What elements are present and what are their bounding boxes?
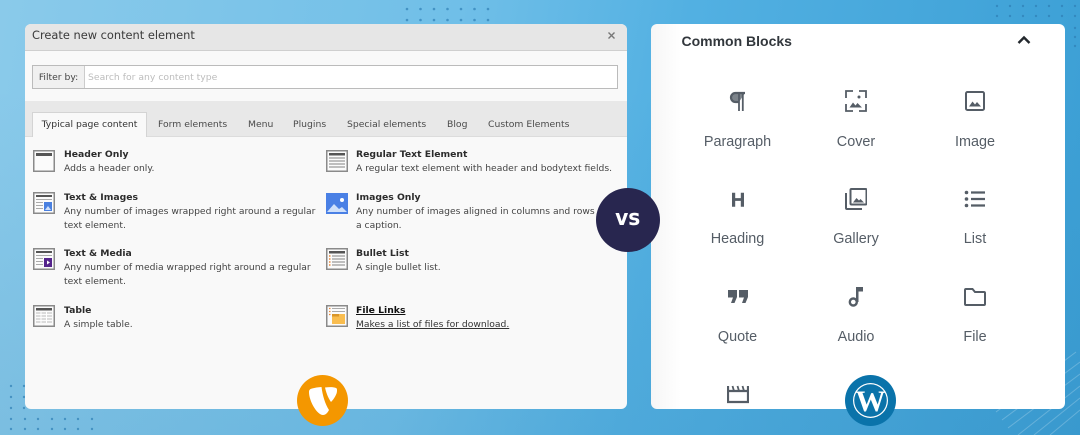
item: Images Only: Images Only	[356, 192, 421, 202]
WordPress logo	[845, 375, 896, 426]
tab: Special elements: Special elements	[347, 119, 426, 130]
heading: Common Blocks: Common Blocks	[682, 33, 792, 49]
icon: file folder	[964, 288, 986, 306]
icon: video clapper	[727, 386, 749, 404]
tab bar background	[25, 101, 627, 137]
icon: images only	[326, 193, 348, 214]
icon: list	[964, 190, 985, 208]
item: File Links	[356, 304, 510, 330]
dialog title: Create new content element	[32, 28, 195, 42]
icon: table	[33, 305, 55, 327]
tab: Blog: Blog	[447, 119, 467, 130]
icon: cover	[845, 90, 867, 112]
label: Heading: Heading	[711, 230, 764, 246]
item: Bullet List	[356, 248, 441, 273]
icon: quote	[728, 290, 748, 303]
filter field	[32, 65, 618, 89]
item: Text & Images: Any number of images wrapped right around a regular text element.	[64, 206, 315, 230]
tab: Custom Elements: Custom Elements	[488, 119, 570, 130]
tab: Form elements: Form elements	[158, 119, 227, 130]
label: File: File	[963, 328, 987, 344]
icon: image	[965, 91, 985, 111]
icon: bullet list	[326, 248, 348, 270]
label: Quote: Quote	[718, 328, 757, 344]
item: Text & Images: Text & Images	[64, 192, 138, 202]
item: Table: A simple table.	[64, 318, 133, 330]
item: Header Only	[64, 149, 154, 174]
icon: regular text	[326, 150, 348, 172]
item: Regular Text Element: A regular text element with header and bodytext fields.	[356, 163, 612, 174]
icon: gallery	[845, 188, 867, 210]
icon: text and media	[33, 248, 55, 270]
VS badge	[596, 188, 660, 252]
item: File Links: File Links	[356, 304, 405, 316]
filter label	[33, 66, 85, 88]
active tab: Typical page content	[42, 119, 137, 130]
panel: TYPO3 content element dialog	[25, 24, 627, 409]
item: Table: Table	[64, 304, 91, 316]
item: Bullet List: A single bullet list.	[356, 262, 441, 273]
item: Text & Media: Text & Media	[64, 248, 132, 259]
icon: text and images	[33, 192, 55, 214]
label: Audio: Audio	[838, 328, 874, 344]
WordPress logo: W	[856, 385, 886, 418]
icon: collapse chevron	[1018, 36, 1030, 44]
icon: file links	[326, 305, 348, 327]
item: Regular Text Element: Regular Text Element	[356, 149, 467, 160]
label: Gallery: Gallery	[833, 230, 879, 246]
label: List: List	[964, 230, 986, 246]
icon: header only	[33, 150, 55, 172]
item: Images Only	[356, 192, 595, 230]
label: Cover: Cover	[837, 134, 875, 150]
tab: Plugins: Plugins	[293, 119, 326, 130]
active tab	[32, 112, 147, 137]
VS badge: vs	[615, 206, 641, 231]
icon: heading	[732, 192, 744, 207]
filter label: Filter by:	[39, 72, 78, 83]
label: Paragraph: Paragraph	[704, 134, 771, 150]
dialog header bar	[25, 24, 627, 51]
item: Header Only: Adds a header only.	[64, 163, 154, 174]
item: Regular Text Element	[356, 149, 612, 174]
item: Text & Media	[64, 248, 311, 287]
icon: paragraph	[730, 92, 745, 111]
panel: WordPress common blocks	[651, 24, 1065, 409]
tab: Menu: Menu	[248, 119, 273, 130]
item: Header Only: Header Only	[64, 149, 129, 160]
search placeholder: Search for any content type	[88, 72, 217, 83]
item: Table	[64, 304, 133, 330]
TYPO3 logo	[297, 375, 348, 426]
icon: audio	[848, 287, 863, 307]
item: Images Only: Any number of images aligned in columns and rows a caption.	[356, 206, 595, 230]
item: Text & Media: Any number of media wrapped right around a regular text element.	[64, 262, 311, 287]
label: Image: Image	[955, 134, 995, 150]
item: Text & Images	[64, 192, 316, 230]
item: Bullet List: Bullet List	[356, 248, 409, 259]
close icon	[608, 32, 615, 39]
item: File Links: Makes a list of files for download.	[356, 318, 509, 330]
